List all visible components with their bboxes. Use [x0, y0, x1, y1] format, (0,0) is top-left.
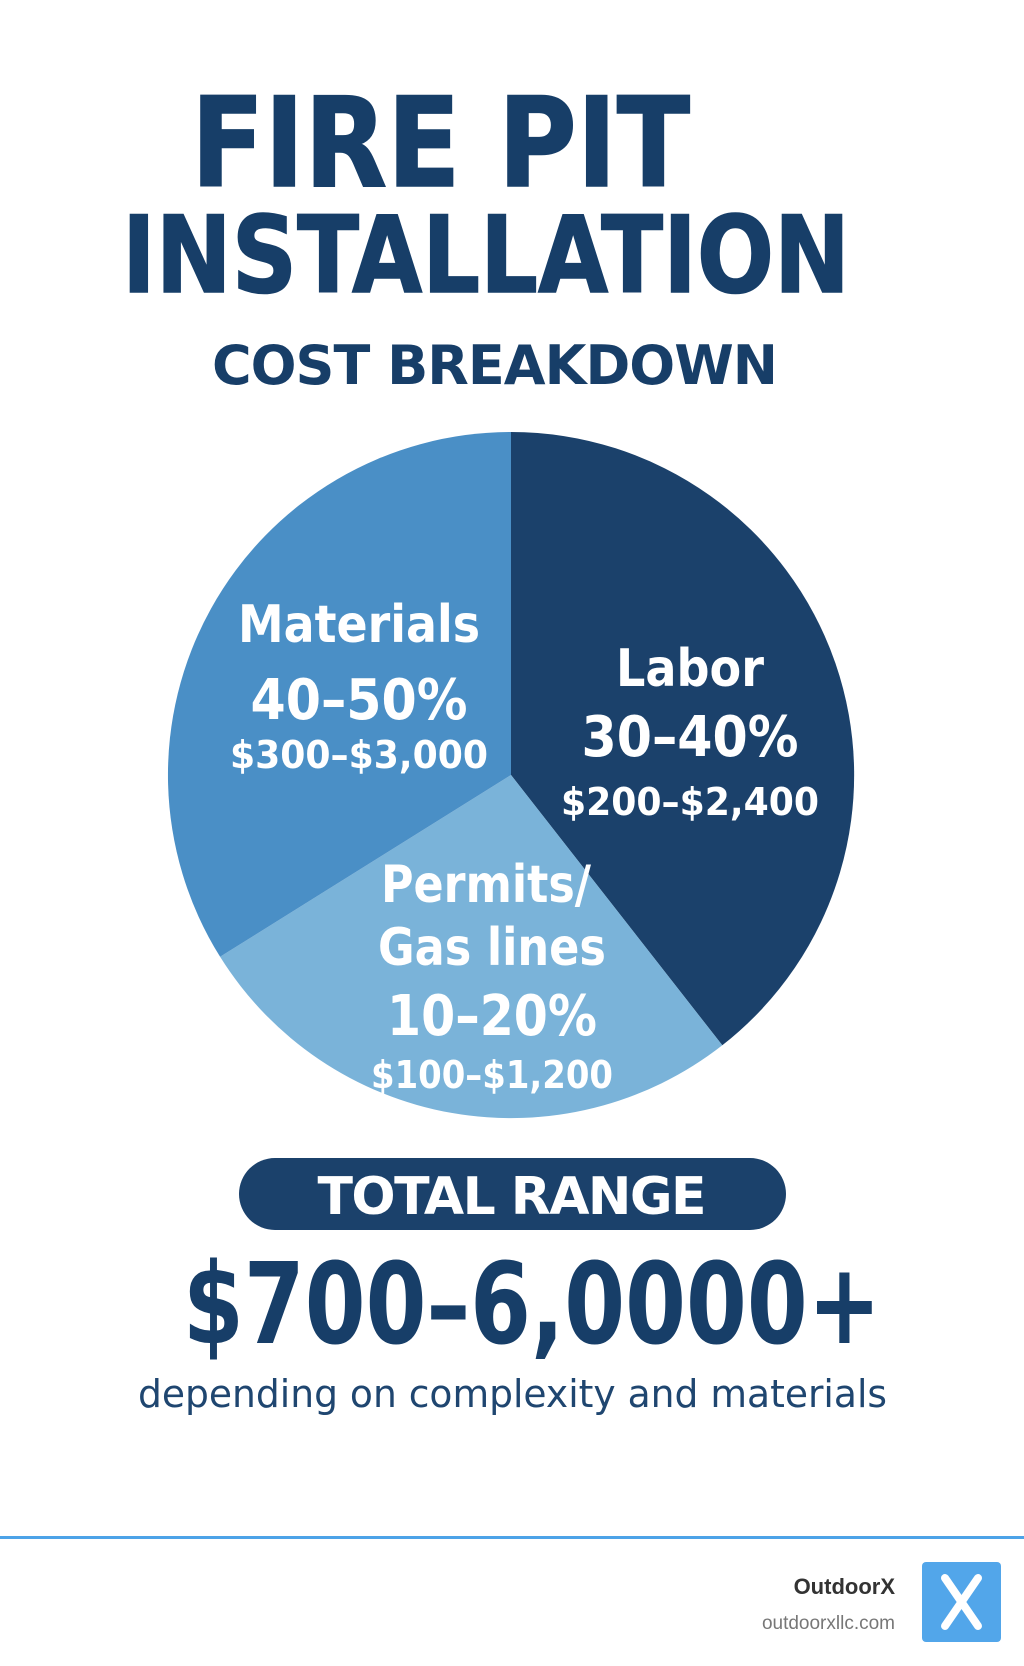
- brand text: [762, 1574, 895, 1634]
- title: [122, 72, 850, 317]
- total range pill: TOTAL RANGE: [318, 1167, 706, 1227]
- slice: labor: [511, 432, 854, 1045]
- label: materials: $300–$3,000: [230, 733, 488, 777]
- footer line: [0, 1536, 1024, 1539]
- label: permits: [371, 855, 613, 1097]
- label: permits: Permits/: [381, 855, 591, 915]
- label: labor: 30–40%: [582, 705, 798, 770]
- caption: depending on complexity and materials: [138, 1372, 887, 1416]
- brand text: OutdoorX: [794, 1574, 895, 1599]
- title: INSTALLATION: [122, 194, 850, 317]
- label: permits: $100–$1,200: [371, 1053, 613, 1097]
- slice: permits: [220, 775, 722, 1118]
- label: materials: 40–50%: [250, 668, 468, 733]
- label: labor: [561, 639, 819, 824]
- label: labor: $200–$2,400: [561, 780, 819, 824]
- label: materials: [230, 595, 488, 777]
- pie chart: [168, 432, 854, 1118]
- icon: logo: [922, 1562, 1001, 1642]
- total range pill: [239, 1158, 786, 1230]
- label: permits: Gas lines: [378, 918, 606, 978]
- label: materials: Materials: [238, 595, 480, 655]
- slice: materials: [168, 432, 511, 957]
- subtitle: COST BREAKDOWN: [212, 334, 778, 397]
- title: FIRE PIT: [191, 72, 690, 216]
- brand text: outdoorxllc.com: [762, 1613, 895, 1634]
- label: labor: Labor: [616, 639, 764, 699]
- label: permits: 10–20%: [387, 984, 597, 1049]
